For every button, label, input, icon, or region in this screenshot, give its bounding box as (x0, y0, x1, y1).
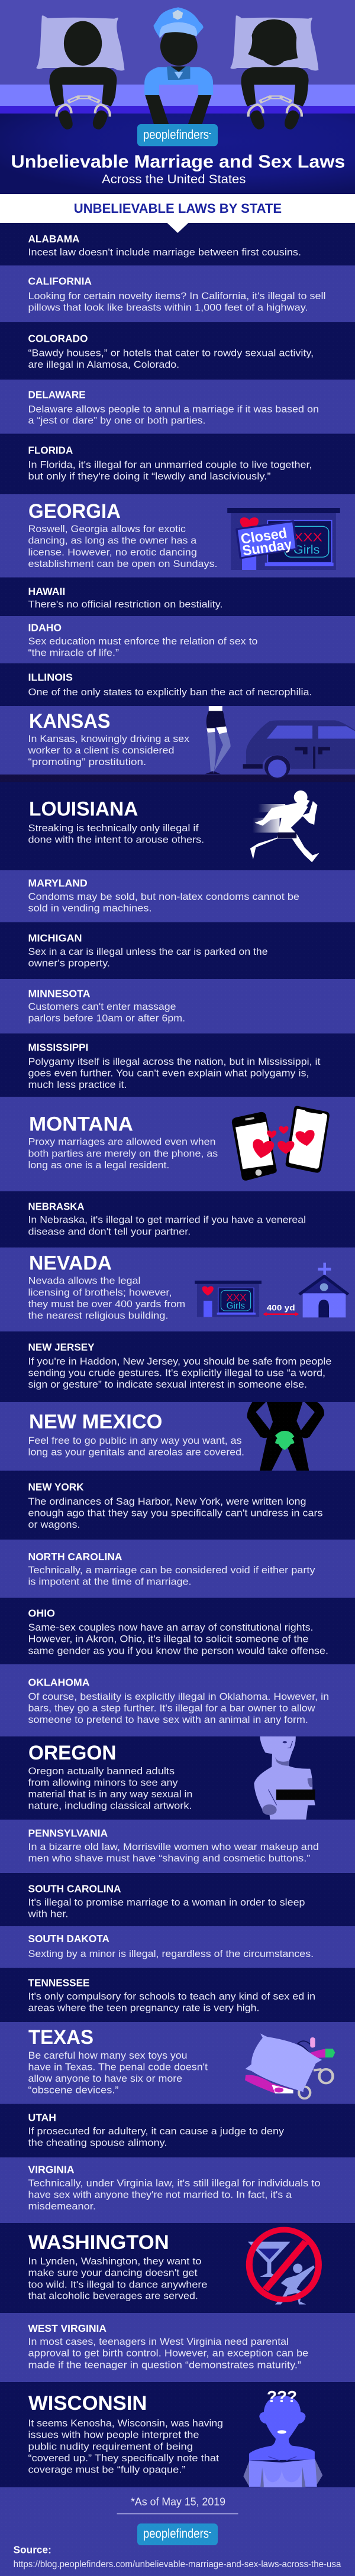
icon: no drinking and dancing sign (248, 2230, 318, 2305)
text: West Virginia law (28, 2336, 308, 2370)
text: New York law: or wagons. (28, 1519, 80, 1530)
text: Virginia law: Technically, under Virginia law, it's still illegal for individuals to (28, 2178, 321, 2189)
text: New Mexico law (28, 1435, 244, 1458)
text: Delaware law: a “jest or dare” by one or both parties. (28, 415, 206, 426)
heading: Ohio: OHIO (28, 1608, 55, 1619)
panel: Illinois (0, 663, 355, 706)
text: Idaho law: Sex education must enforce the relation of sex to (28, 636, 258, 647)
heading: South Carolina: SOUTH CAROLINA (28, 1883, 121, 1895)
heading: Utah: UTAH (28, 2112, 56, 2124)
heading: Hawaii: HAWAII (28, 585, 65, 597)
text: Minnesota law (28, 1001, 185, 1023)
panel: Wisconsin (0, 2382, 355, 2487)
text: North Carolina law: is impotent at the time of marriage. (28, 1576, 192, 1587)
panel: New Mexico (0, 1402, 355, 1471)
text: New Jersey law (28, 1356, 331, 1390)
panel: Minnesota (0, 979, 355, 1033)
text: Delaware law (28, 403, 319, 426)
heading: Oregon: OREGON (28, 1742, 116, 1764)
heading: Virginia: VIRGINIA (28, 2164, 75, 2176)
text: Idaho law (28, 636, 258, 658)
text: Ohio law: same gender as you if you know the person would take offense. (28, 1645, 328, 1656)
text: source url: https://blog.peoplefinders.com/unbelievable-marriage-and-sex-laws-across-the-usa (14, 2559, 341, 2569)
text: Washington law: make sure your dancing doesn't get (28, 2267, 198, 2279)
text: Nevada law: they must be over 400 yards from (28, 1298, 185, 1310)
icon: sex worker legs and car (205, 706, 355, 779)
text: Oklahoma law (28, 1691, 329, 1725)
text: Wisconsin law: It seems Kenosha, Wisconsin, was having (28, 2418, 223, 2429)
text: Colorado law (28, 347, 314, 370)
icon: club closed on Sunday (227, 508, 340, 570)
section heading band: UNBELIEVABLE LAWS BY STATE (74, 201, 282, 216)
panel: Tennessee (0, 1968, 355, 2022)
heading: Georgia: GEORGIA (28, 500, 121, 523)
text: Montana law: long as one is a legal resident. (28, 1159, 169, 1171)
panel: Florida (0, 434, 355, 494)
text: Kansas law: “promoting” prostitution. (28, 756, 146, 767)
text: Michigan law (28, 946, 267, 969)
text: Louisiana law: done with the intent to arouse others. (28, 834, 204, 845)
heading: Wisconsin: WISCONSIN (28, 2392, 147, 2415)
text: Maryland law: sold in vending machines. (28, 902, 151, 913)
illustration: handcuffed couple and police officer (36, 7, 318, 129)
text: Pennsylvania law: men who shave must have “shaving and cosmetic buttons.” (28, 1853, 311, 1864)
text: West Virginia law: In most cases, teenagers in West Virginia need parental (28, 2336, 289, 2347)
icon: censored statue (254, 1736, 315, 1820)
panel: Nevada (0, 1248, 355, 1331)
heading: Tennessee: TENNESSEE (28, 1977, 90, 1989)
heading: Louisiana: LOUISIANA (29, 798, 138, 820)
icon: club closed on Sunday: Closed (240, 526, 288, 547)
text: Ohio law (28, 1622, 328, 1656)
text: California law: pillows that look like breasts within 1,000 feet of a highway. (28, 302, 308, 313)
text: Georgia law: dancing, as long as the owner has a (28, 535, 197, 546)
panel: Alabama (0, 223, 355, 265)
heading: Nebraska: NEBRASKA (28, 1201, 85, 1213)
text: Texas law: “obscene devices.” (28, 2085, 119, 2096)
heading: South Dakota: SOUTH DAKOTA (28, 1933, 109, 1945)
text: Washington law (28, 2256, 208, 2302)
text: California law (28, 290, 325, 313)
text: Mississippi law: Polygamy itself is illegal across the nation, but in Mississippi, it (28, 1056, 321, 1067)
text: Texas law: allow anyone to have six or more (28, 2073, 182, 2084)
text: Florida law: but only if they're doing it “lewdly and lasciviously.” (28, 471, 271, 482)
text: Oregon law: material that is in any way sexual in (28, 1788, 192, 1800)
heading: Montana: MONTANA (29, 1113, 133, 1135)
text: Wisconsin law: “covered up.” They specifically note that (28, 2452, 219, 2464)
text: South Carolina law (27, 1897, 305, 1920)
text: Kansas law: worker to a client is considered (27, 745, 175, 756)
text: Colorado law: are illegal in Alamosa, Colorado. (28, 359, 179, 370)
text: Nevada law: the nearest religious building. (28, 1310, 168, 1321)
text: Tennessee law: areas where the teen pregnancy rate is very high. (28, 2003, 259, 2014)
heading: Delaware: DELAWARE (28, 389, 86, 401)
logo: peoplefinders footer (137, 2523, 218, 2545)
text: Virginia law: have sex with anyone they're not married to. In fact, it's a (28, 2189, 292, 2201)
text: Alabama law: Incest law doesn't include marriage between first cousins. (28, 247, 301, 258)
heading: New York: NEW YORK (28, 1481, 84, 1493)
text: Mississippi law (28, 1056, 321, 1090)
text: Nebraska law: In Nebraska, it's illegal to get married if you have a venereal (28, 1214, 306, 1226)
text: Nevada law (28, 1275, 185, 1321)
heading: Illinois: ILLINOIS (28, 672, 73, 683)
logo: peoplefinders (137, 124, 218, 146)
text: Kansas law (27, 733, 190, 767)
text: Pennsylvania law: In a bizarre old law, Morrisville women who wear makeup and (28, 1841, 319, 1852)
text: California law: Looking for certain novelty items? In California, it's illegal to sell (28, 290, 325, 302)
text: Maryland law: Condoms may be sold, but non-latex condoms cannot be (28, 891, 299, 902)
heading: Nevada: NEVADA (29, 1252, 112, 1274)
text: New Mexico law: Feel free to go public in any way you want, as (28, 1435, 241, 1446)
text: New York law (28, 1496, 323, 1530)
text: Wisconsin law: issues with how people interpret the (28, 2429, 199, 2441)
text: Colorado law: “Bawdy houses,” or hotels that cater to rowdy sexual activity, (28, 347, 314, 358)
panel: Mississippi (0, 1033, 355, 1097)
heading: source: Source: (14, 2543, 51, 2555)
icon: pillow hiding sex toys (245, 2033, 335, 2098)
text: Oregon law (28, 1765, 192, 1812)
title: Unbelievable Marriage and Sex Laws (11, 151, 345, 171)
icon: brothel (195, 1281, 262, 1317)
icon: club closed on Sunday: Girls (293, 543, 320, 556)
text: Washington law: that alcoholic beverages are served. (28, 2290, 198, 2302)
text: Utah law: If prosecuted for adultery, it can cause a judge to deny (28, 2125, 285, 2137)
panel: Hawaii (0, 578, 355, 616)
subtitle: Across the United States (102, 173, 246, 186)
text: Oklahoma law: someone to pretend to have sex with an animal in any form. (28, 1714, 308, 1725)
panel: footer (0, 2487, 355, 2576)
text: West Virginia law: made if the teenager in question “demonstrates maturity.” (28, 2359, 301, 2370)
text: Georgia law: license. However, no erotic dancing (28, 546, 197, 558)
heading: West Virginia: WEST VIRGINIA (28, 2322, 106, 2334)
panel: Kansas (0, 706, 355, 782)
text: Nevada law: Nevada allows the legal (28, 1275, 141, 1287)
heading: Alabama: ALABAMA (28, 233, 80, 245)
text: Minnesota law: Customers can't enter massage (28, 1001, 176, 1012)
icon: streaker running (250, 790, 320, 862)
text: Texas law: have in Texas. The penal code doesn't (28, 2062, 208, 2073)
panel: Washington (0, 2223, 355, 2313)
panel: Delaware (0, 380, 355, 434)
text: Texas law (28, 2050, 208, 2096)
panel: Oklahoma (0, 1664, 355, 1736)
text: Virginia law (28, 2178, 321, 2212)
text: New York law: The ordinances of Sag Harbor, New York, were written long (28, 1496, 306, 1507)
panel: New Jersey (0, 1331, 355, 1402)
icon: confused woman in sheer top (243, 2396, 322, 2487)
text: South Carolina law: It's illegal to promise marriage to a woman in order to sleep (28, 1897, 305, 1908)
panel: South Carolina (0, 1873, 355, 1926)
heading: Michigan: MICHIGAN (28, 932, 82, 944)
text: New York law: enough ago that they say you specifically can't undress in cars (28, 1508, 323, 1519)
heading: Minnesota: MINNESOTA (28, 988, 91, 1000)
text: date note: *As of May 15, 2019 (131, 2496, 225, 2507)
panel: Pennsylvania (0, 1820, 355, 1873)
text: Oklahoma law: Of course, bestiality is explicitly illegal in Oklahoma. However, in (28, 1691, 329, 1702)
label: distance 400 yd (263, 1304, 299, 1316)
panel: California (0, 265, 355, 322)
icon: club closed on Sunday: XXX (293, 530, 322, 544)
heading: California: CALIFORNIA (28, 276, 92, 287)
text: New Mexico law: long as your genitals and areolas are covered. (28, 1447, 244, 1458)
panel: Idaho (0, 616, 355, 663)
heading: Kansas: KANSAS (29, 710, 110, 733)
icon: legs (205, 706, 231, 774)
icon: phones with hearts (232, 1106, 330, 1181)
icon: question marks: ??? (267, 2387, 297, 2406)
text: North Carolina law (28, 1564, 315, 1587)
text: Maryland law (28, 891, 299, 913)
logo: peoplefinders: peoplefinders (143, 127, 209, 142)
text: Illinois law: One of the only states to explicitly ban the act of necrophilia. (28, 686, 312, 698)
text: Louisiana law (28, 822, 204, 845)
text: Nebraska law: disease and don't tell your partner. (28, 1226, 191, 1237)
logo: peoplefinders footer: peoplefinders (143, 2526, 209, 2541)
icon: car (243, 720, 355, 779)
icon: figure with leaf (247, 1402, 324, 1471)
text: Michigan law: Sex in a car is illegal unless the car is parked on the (28, 946, 267, 957)
panel: Nebraska (0, 1191, 355, 1248)
panel: New York (0, 1471, 355, 1540)
panel: Georgia (0, 494, 355, 578)
text: Oklahoma law: bars, they go a step further. It's illegal for a bar owner to allow (28, 1702, 315, 1713)
text: New Jersey law: sending you crude gestures. It's explicitly illegal to use “a word, (28, 1367, 325, 1378)
heading: Colorado: COLORADO (28, 333, 88, 345)
panel: Texas (0, 2022, 355, 2104)
icon: brothel 400 yards from church (195, 1263, 348, 1317)
text: Ohio law: However, in Akron, Ohio, it's illegal to solicit someone of the (28, 1634, 309, 1645)
text: Idaho law: “the miracle of life.” (28, 647, 119, 658)
text: Mississippi law: much less practice it. (28, 1079, 127, 1090)
text: West Virginia law: approval to get birth control. However, an exception can be (28, 2348, 308, 2359)
text: Ohio law: Same-sex couples now have an array of constitutional rights. (28, 1622, 314, 1633)
text: Tennessee law (28, 1991, 315, 2014)
text: Utah law (28, 2125, 285, 2149)
text: Michigan law: owner's property. (28, 958, 110, 969)
panel: North Carolina (0, 1540, 355, 1598)
text: Georgia law: Roswell, Georgia allows for exotic (28, 523, 186, 534)
text: Nevada law: licensing of brothels; however, (28, 1287, 172, 1298)
panel: Virginia (0, 2157, 355, 2223)
text: New Jersey law: If you're in Haddon, New Jersey, you should be safe from people (28, 1356, 331, 1367)
text: Montana law: both parties are merely on the phone, as (28, 1148, 218, 1159)
text: Pennsylvania law (28, 1841, 319, 1864)
text: Wisconsin law (28, 2418, 223, 2475)
panel: South Dakota (0, 1926, 355, 1968)
text: Minnesota law: parlors before 10am or after 6pm. (28, 1012, 185, 1023)
text: Florida law: In Florida, it's illegal for an unmarried couple to live together, (28, 459, 312, 471)
text: Texas law: Be careful how many sex toys you (28, 2050, 187, 2061)
section heading band (0, 194, 355, 223)
text: Georgia law (28, 523, 218, 569)
heading: Oklahoma: OKLAHOMA (28, 1677, 90, 1689)
label: distance 400 yd: 400 yd (267, 1304, 295, 1313)
text: Montana law: Proxy marriages are allowed even when (28, 1136, 215, 1148)
text: Georgia law: establishment can be open on Sundays. (28, 558, 218, 569)
text: Mississippi law: goes even further. You can't even explain what polygamy is, (28, 1068, 309, 1079)
heading: Maryland: MARYLAND (28, 877, 88, 889)
icon: woman in bed with handcuffs (230, 15, 318, 129)
text: Wisconsin law: public nudity requirement of being (28, 2441, 193, 2452)
panel: Michigan (0, 922, 355, 979)
header (0, 0, 355, 194)
heading: Florida: FLORIDA (28, 445, 73, 456)
text: Kansas law: In Kansas, knowingly driving a sex (28, 733, 190, 744)
text: Utah law: the cheating spouse alimony. (28, 2137, 167, 2149)
text: Louisiana law: Streaking is technically only illegal if (28, 822, 199, 834)
arrow: pointer from heading (167, 223, 188, 233)
text: South Carolina law: with her. (27, 1908, 69, 1920)
panel: Montana (0, 1097, 355, 1191)
icon: club closed on Sunday: Sunday (241, 537, 293, 559)
panel: Utah (0, 2104, 355, 2157)
text: North Carolina law: Technically, a marriage can be considered void if either party (28, 1564, 315, 1576)
text: Nebraska law (28, 1214, 306, 1237)
text: Oregon law: Oregon actually banned adults (28, 1765, 175, 1777)
heading: Mississippi: MISSISSIPPI (28, 1042, 88, 1054)
text: Tennessee law: It's only compulsory for schools to teach any kind of sex ed in (28, 1991, 315, 2002)
text: Oregon law: from allowing minors to see any (28, 1777, 178, 1788)
icon: church (299, 1263, 348, 1317)
icon: man in bed with handcuffs (36, 15, 124, 129)
heading: Pennsylvania: PENNSYLVANIA (28, 1827, 108, 1839)
panel: Louisiana (0, 782, 355, 870)
panel: Ohio (0, 1598, 355, 1664)
text: Washington law: too wild. It's illegal to dance anywhere (28, 2279, 208, 2290)
icon: brothel: Girls (227, 1301, 245, 1311)
panel: Oregon (0, 1736, 355, 1820)
text: Delaware law: Delaware allows people to annul a marriage if it was based on (28, 403, 319, 414)
panel: West Virginia (0, 2313, 355, 2382)
panel: Maryland (0, 870, 355, 922)
heading: New Mexico: NEW MEXICO (29, 1411, 162, 1433)
text: Washington law: In Lynden, Washington, they want to (28, 2256, 201, 2267)
heading: Washington: WASHINGTON (28, 2231, 169, 2254)
text: Wisconsin law: coverage must be “fully opaque.” (28, 2464, 186, 2475)
heading: New Jersey: NEW JERSEY (28, 1342, 95, 1353)
text: Virginia law: misdemeanor. (28, 2201, 96, 2212)
heading: North Carolina: NORTH CAROLINA (28, 1551, 122, 1563)
heading: Texas: TEXAS (28, 2026, 93, 2049)
text: Montana law (28, 1136, 218, 1171)
heading: Idaho: IDAHO (28, 622, 62, 634)
text: South Dakota law: Sexting by a minor is illegal, regardless of the circumstances. (28, 1948, 314, 1959)
text: Hawaii law: There's no official restriction on bestiality. (28, 599, 222, 610)
icon: police officer (144, 7, 213, 125)
text: New Jersey law: sign or gesture” to indicate sexual interest in someone else. (28, 1379, 307, 1390)
icon: brothel: XXX (227, 1293, 246, 1303)
text: Oregon law: nature, including classical artwork. (28, 1800, 192, 1812)
panel: Colorado (0, 322, 355, 380)
text: Florida law (28, 459, 312, 482)
